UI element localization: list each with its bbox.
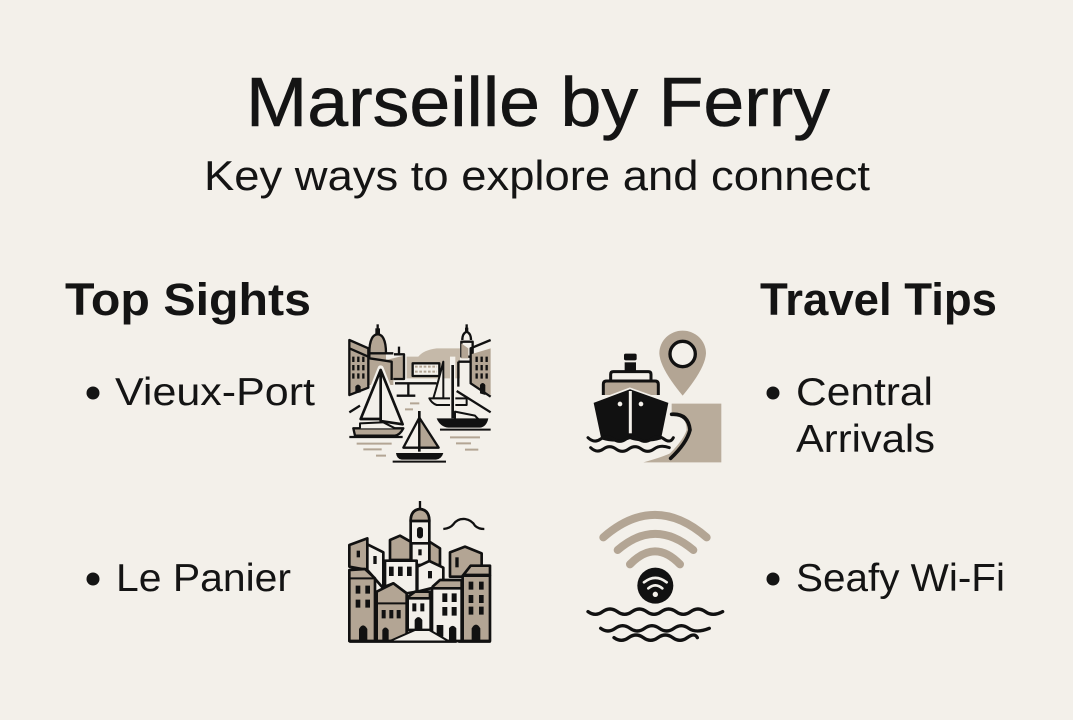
- list item: Central Arrivals: Central: [796, 371, 933, 414]
- list item: Vieux-Port: Vieux-Port: [115, 371, 315, 414]
- subtitle: Key ways to explore and connect: [204, 152, 870, 199]
- heading: travel tips: Travel Tips: [760, 274, 997, 325]
- panel: travel tips: [588, 274, 1005, 640]
- list item: Seafy Wi-Fi: Seafy Wi-Fi: [796, 557, 1005, 600]
- title: Marseille by Ferry: [246, 63, 830, 141]
- list item: Central Arrivals: [766, 371, 935, 461]
- list item: Central Arrivals: Arrivals: [796, 418, 935, 461]
- icon: Le Panier hillside buildings: [349, 501, 491, 642]
- icon: harbour with sailboats: [349, 324, 491, 462]
- list item: Le Panier: Le Panier: [116, 557, 291, 600]
- heading: top sights: Top Sights: [65, 274, 311, 325]
- panel: top sights: [65, 274, 491, 642]
- icon: wi-fi signal over waves: [588, 515, 723, 640]
- icon: ferry, location pin and quay: [588, 331, 721, 462]
